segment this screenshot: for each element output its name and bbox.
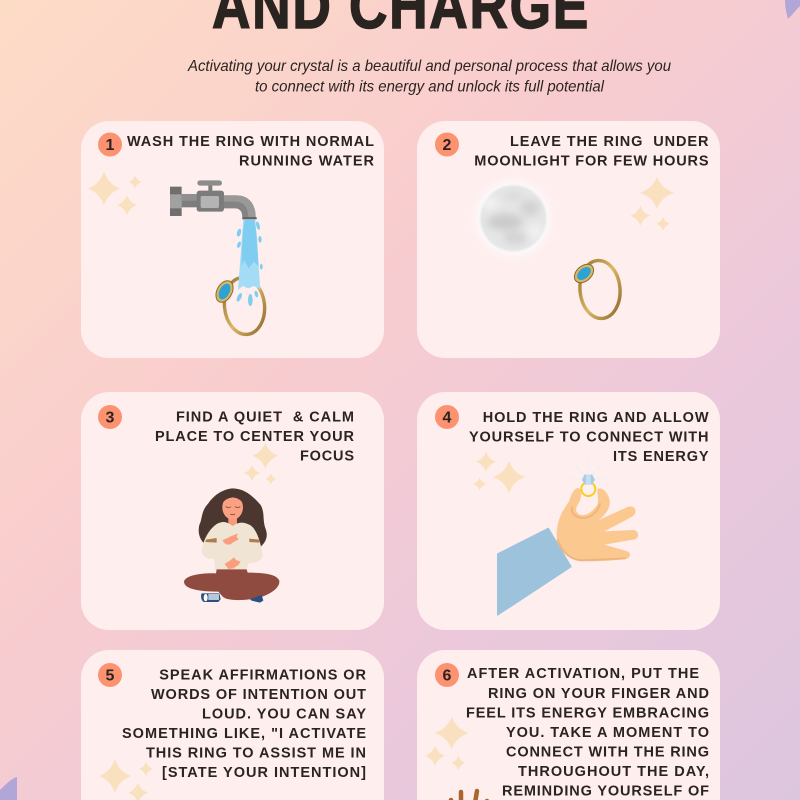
step 3 sparkles bbox=[244, 443, 278, 484]
step 2 sparkles bbox=[630, 177, 674, 231]
panel: step 6 after activation bbox=[417, 650, 720, 800]
subtitle bbox=[187, 58, 671, 96]
corner decoration: bottom left bbox=[0, 777, 17, 800]
panel: step 3 quiet place bbox=[81, 392, 384, 630]
step 6 sparkles bbox=[425, 717, 469, 770]
step 6 text: RING ON YOUR FINGER AND bbox=[488, 686, 709, 702]
panel: step 4 hold the ring bbox=[417, 392, 720, 630]
step 5 sparkles bbox=[99, 759, 153, 800]
step 4 sparkles bbox=[473, 452, 525, 493]
step 2 text: LEAVE THE RING UNDER bbox=[510, 134, 709, 150]
step 3 text: FIND A QUIET & CALM bbox=[176, 410, 354, 426]
step 5 badge bbox=[98, 663, 122, 687]
step 1 sparkles bbox=[88, 172, 142, 215]
icon: moon bbox=[478, 182, 549, 254]
step 1 badge: 1 bbox=[106, 137, 115, 154]
step 4 badge: 4 bbox=[443, 410, 452, 426]
corner decoration: top right bbox=[785, 0, 800, 19]
step 4 text bbox=[469, 410, 709, 465]
subtitle: Activating your crystal is a beautiful and personal process that allows you bbox=[187, 58, 671, 75]
step 1 text bbox=[127, 134, 375, 170]
step 4 text: ITS ENERGY bbox=[613, 449, 709, 465]
icon: water stream bbox=[236, 219, 263, 306]
step 4 text: HOLD THE RING AND ALLOW bbox=[483, 410, 709, 426]
step 6 badge: 6 bbox=[443, 668, 452, 684]
step 6 text: YOU. TAKE A MOMENT TO bbox=[506, 725, 709, 741]
icon: meditating woman bbox=[184, 488, 279, 603]
icon: ring under water bbox=[212, 276, 267, 336]
step 3 text: FOCUS bbox=[300, 448, 354, 464]
step 6 text: AFTER ACTIVATION, PUT THE bbox=[467, 666, 699, 682]
step 5 text bbox=[122, 667, 367, 781]
icon: ring bbox=[571, 259, 622, 320]
step 6 text bbox=[466, 666, 709, 800]
step 1 text: RUNNING WATER bbox=[239, 154, 375, 170]
panel: step 5 affirmations bbox=[81, 650, 384, 800]
step 3 text: PLACE TO CENTER YOUR bbox=[155, 429, 355, 445]
step 5 badge: 5 bbox=[106, 668, 115, 684]
step 6 text: THROUGHOUT THE DAY, bbox=[518, 764, 709, 780]
icon: hand fingers at bottom bbox=[450, 791, 487, 800]
step 3 badge: 3 bbox=[106, 410, 115, 426]
subtitle: to connect with its energy and unlock its full potential bbox=[255, 78, 604, 96]
step 2 badge bbox=[435, 132, 459, 156]
step 3 badge bbox=[98, 405, 122, 429]
icon: faucet bbox=[170, 180, 257, 219]
step 6 text: FEEL ITS ENERGY EMBRACING bbox=[466, 706, 709, 722]
step 1 text: WASH THE RING WITH NORMAL bbox=[127, 134, 374, 150]
step 1 badge bbox=[98, 132, 122, 156]
step 6 text: CONNECT WITH THE RING bbox=[506, 744, 709, 760]
step 2 text bbox=[474, 134, 709, 170]
step 2 badge: 2 bbox=[443, 137, 452, 154]
step 5 text: SPEAK AFFIRMATIONS OR bbox=[159, 667, 367, 683]
step 6 badge bbox=[435, 663, 459, 687]
step 6 text: REMINDING YOURSELF OF bbox=[502, 784, 709, 800]
step 2 text: MOONLIGHT FOR FEW HOURS bbox=[474, 154, 709, 170]
icon: hand holding ring bbox=[498, 458, 638, 615]
step 5 text: WORDS OF INTENTION OUT bbox=[151, 687, 366, 703]
step 5 text: THIS RING TO ASSIST ME IN bbox=[146, 746, 366, 762]
step 3 text bbox=[155, 410, 355, 464]
step 5 text: LOUD. YOU CAN SAY bbox=[202, 706, 366, 722]
step 5 text: SOMETHING LIKE, "I ACTIVATE bbox=[122, 726, 366, 742]
panel: step 1 wash the ring bbox=[81, 121, 384, 358]
panel: step 2 moonlight bbox=[417, 121, 720, 358]
step 5 text: [STATE YOUR INTENTION] bbox=[162, 765, 366, 781]
step 4 badge bbox=[435, 405, 459, 429]
step 4 text: YOURSELF TO CONNECT WITH bbox=[469, 430, 708, 446]
